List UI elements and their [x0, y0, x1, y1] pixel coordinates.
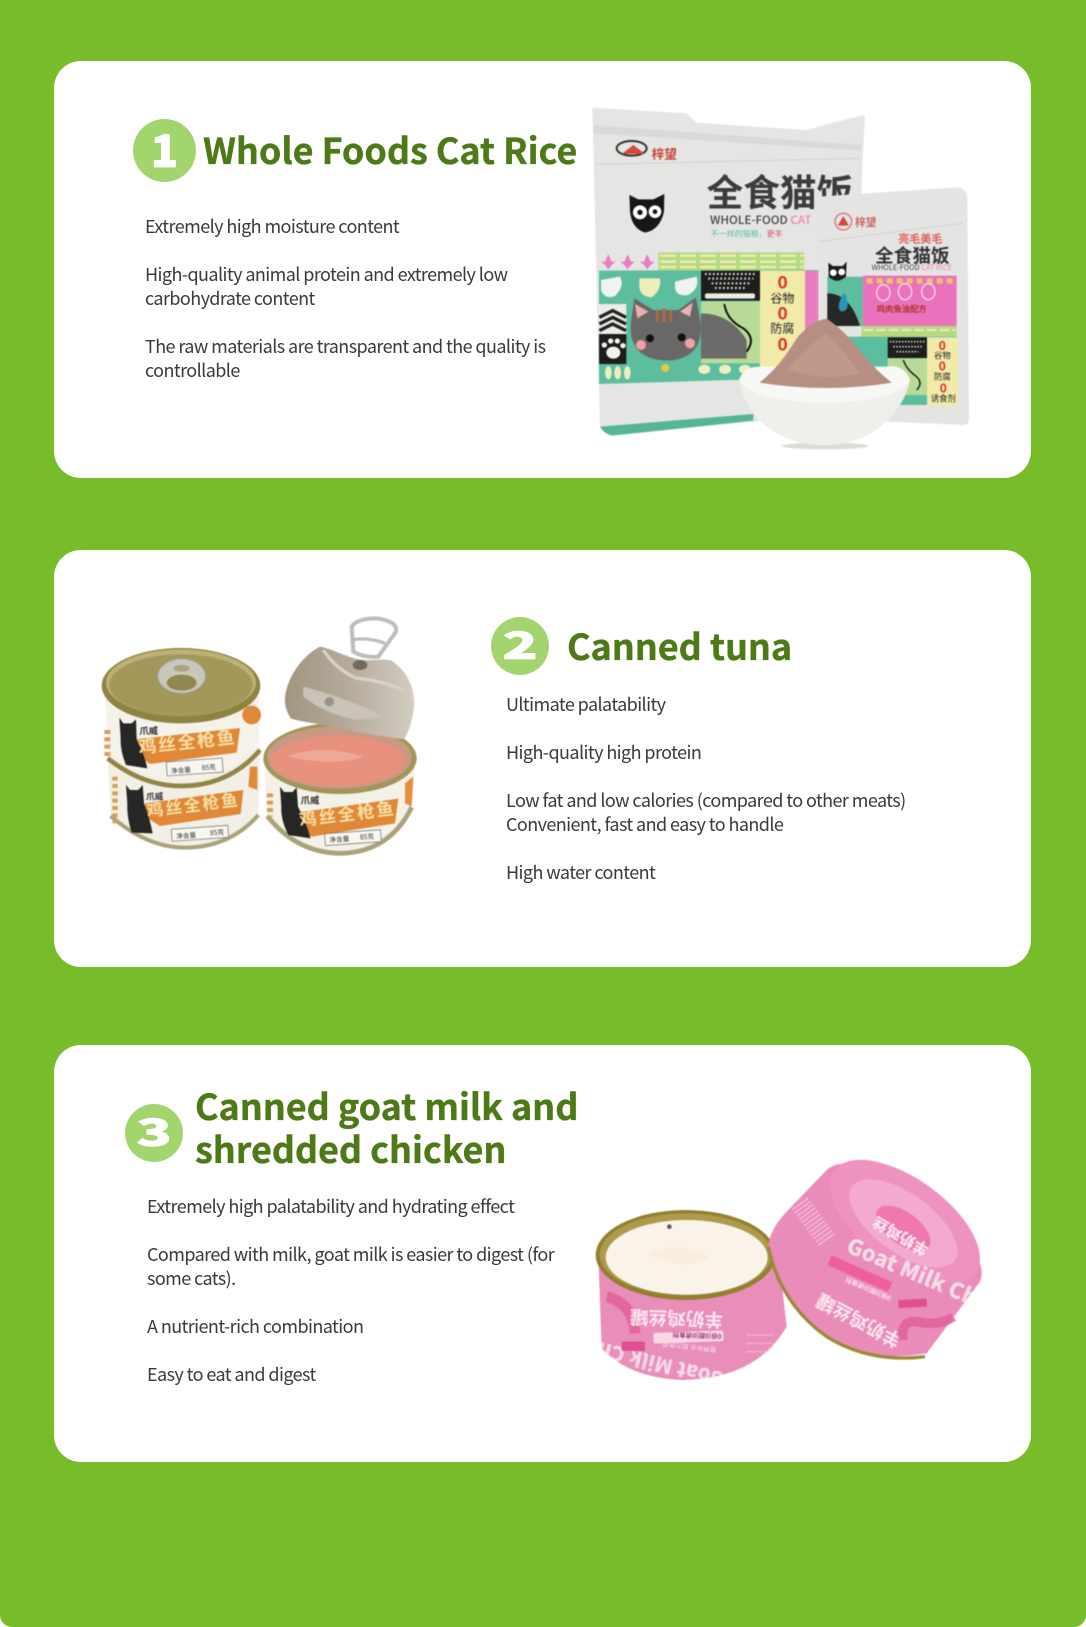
text block: goat milk benefits: some cats).	[147, 1265, 236, 1291]
right can	[766, 1159, 982, 1360]
upper left can: 鸡丝全枪鱼	[137, 723, 236, 759]
text block: canned tuna benefits: Low fat and low calories (compared to other meats)	[506, 787, 906, 813]
big bag: 防腐	[770, 320, 794, 337]
black dots panel	[701, 271, 760, 301]
upper left can: 爪威	[139, 723, 159, 737]
text block: cat rice benefits: The raw materials are transparent and the quality is	[145, 333, 546, 359]
open right can	[263, 618, 417, 853]
panel: whole foods cat rice	[54, 61, 1031, 478]
lower left can: 爪威	[146, 790, 164, 802]
right can: Goat Milk Chic	[842, 1229, 1001, 1320]
big bag: 0	[778, 299, 788, 324]
big bag: 梓望	[652, 143, 677, 162]
small bag: 防腐	[934, 370, 951, 382]
text block: cat rice benefits: High-quality animal protein and extremely low	[145, 261, 507, 287]
lower left can: 鸡丝全枪鱼	[145, 787, 239, 822]
left can	[594, 1209, 788, 1381]
text block: cat rice benefits: Extremely high moisture content	[145, 213, 399, 239]
heading: canned goat milk and shredded chicken	[195, 1079, 578, 1174]
small bag	[818, 187, 969, 425]
lid	[285, 647, 414, 739]
teal panel	[599, 270, 818, 384]
heading: canned goat milk and shredded chicken: Canned goat milk and	[195, 1079, 578, 1131]
big bag: 0	[778, 269, 788, 294]
left can: 营养补水 助力免疫	[661, 1340, 717, 1355]
illustration: cat rice bags and bowl	[592, 108, 970, 450]
icon: number 1 badge	[133, 119, 196, 182]
panel: canned tuna	[54, 550, 1031, 967]
big bag: 不一样的猫粮，更丰	[711, 229, 783, 240]
small bag: 鸡肉鱼油配方	[877, 303, 927, 315]
pink diamonds	[601, 254, 655, 269]
open right can: 鸡丝全枪鱼	[298, 795, 395, 831]
lower left can: 净含量	[176, 829, 197, 841]
small bag: 全食猫饭	[875, 241, 950, 268]
text block: goat milk benefits: Extremely high palatability and hydrating effect	[147, 1193, 514, 1219]
small bag: 0	[939, 358, 946, 375]
open right can: 爪威	[301, 792, 320, 806]
illustration: goat milk cans	[594, 1159, 982, 1381]
text block: cat rice benefits: carbohydrate content	[145, 285, 315, 311]
grey cat head	[631, 297, 701, 361]
illustration: tuna cans	[100, 616, 418, 856]
right can: 羊奶鸡丝	[868, 1212, 932, 1261]
small bag: 梓望	[855, 215, 877, 230]
open right can: 净含量	[329, 833, 350, 844]
text block: goat milk benefits: Easy to eat and digest	[147, 1361, 316, 1387]
lower left can	[107, 747, 260, 848]
text block: cat rice benefits	[145, 213, 546, 383]
heading: canned goat milk and shredded chicken: shredded chicken	[195, 1122, 506, 1174]
heading: whole foods cat rice: Whole Foods Cat Rice	[203, 123, 577, 175]
black cat upper can	[119, 718, 147, 768]
text block: canned tuna benefits: Convenient, fast and easy to handle	[506, 811, 783, 837]
upper left can: 85克	[201, 761, 216, 772]
black cat lower can	[126, 785, 153, 833]
stripe band	[658, 252, 804, 270]
left can: Goat Milk Chi	[587, 1334, 728, 1397]
text block: canned tuna benefits: High water content	[506, 859, 655, 885]
black cat right can	[280, 787, 311, 838]
upper left can: 净含量	[171, 764, 191, 775]
text block: canned tuna benefits	[506, 691, 906, 885]
small bag: 0	[940, 380, 947, 397]
big bag	[592, 108, 865, 436]
small bag: 0	[939, 337, 946, 354]
small bag: 谷物	[934, 350, 951, 362]
right can: 0谷|0胶|0诱食剂	[843, 1275, 892, 1304]
icon: number 3 badge	[125, 1104, 183, 1162]
text block: canned tuna benefits: Ultimate palatability	[506, 691, 665, 717]
panel: canned goat milk and shredded chicken	[54, 1045, 1031, 1462]
upper left can	[102, 648, 261, 779]
text block: goat milk benefits: Compared with milk, goat milk is easier to digest (for	[147, 1241, 554, 1267]
green cat panel	[701, 301, 760, 363]
left can: 0谷|0胶|0诱食剂	[672, 1330, 722, 1342]
icon: number 2 badge: 2	[502, 617, 538, 671]
big bag: 全食猫饭	[707, 163, 853, 217]
right can: 羊奶鸡丝罐	[811, 1287, 906, 1355]
text block: canned tuna benefits: High-quality high protein	[506, 739, 701, 765]
lower left can: 85克	[210, 826, 225, 837]
big bag: 谷物	[770, 290, 794, 307]
icon: number 3 badge: 3	[136, 1104, 172, 1158]
text block: goat milk benefits	[147, 1193, 555, 1387]
black cat	[629, 194, 664, 233]
left can: 羊奶鸡丝罐	[629, 1304, 724, 1334]
cream panel	[760, 271, 805, 367]
big bag: WHOLE-FOOD CAT	[710, 211, 811, 228]
bowl and food	[739, 319, 910, 449]
big bag: 0	[778, 331, 788, 356]
small bag: 诱食剂	[931, 393, 956, 405]
pull ring	[352, 618, 396, 657]
heading: canned tuna: Canned tuna	[567, 619, 792, 671]
text block: cat rice benefits: controllable	[145, 357, 240, 383]
text block: goat milk benefits: A nutrient-rich combination	[147, 1313, 363, 1339]
small bag: 亮毛美毛	[898, 231, 942, 247]
bottom stripe	[600, 414, 753, 436]
icon: number 2 badge	[491, 617, 549, 675]
small bag: WHOLE-FOOD CAT RICE	[872, 262, 952, 273]
open right can: 85克	[360, 831, 375, 842]
